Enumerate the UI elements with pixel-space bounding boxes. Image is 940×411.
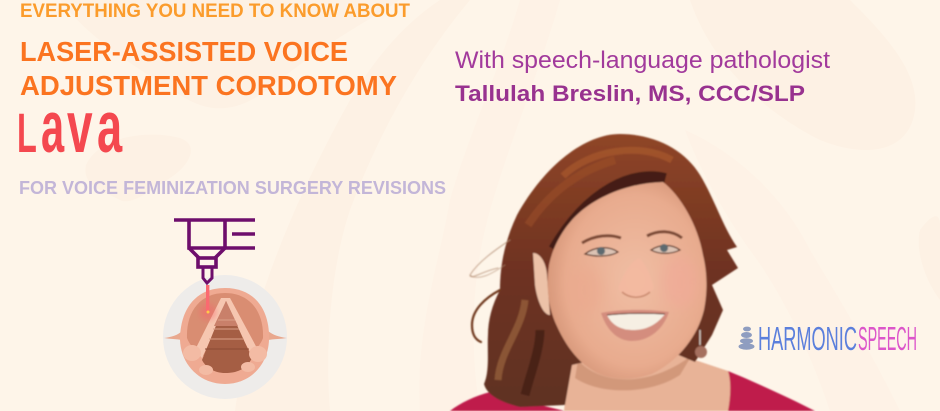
- main title: ADJUSTMENT CORDOTOMY: [20, 70, 397, 101]
- LAVA wordmark: L: [17, 102, 37, 164]
- subtitle: FOR VOICE FEMINIZATION SURGERY REVISIONS: [19, 178, 446, 198]
- wordmark: Harmonic: HARMONIC: [758, 320, 857, 357]
- LAVA wordmark: [17, 86, 123, 168]
- portrait photo: [450, 134, 815, 411]
- laser beam: [200, 285, 216, 320]
- hair: [484, 134, 738, 407]
- LAVA wordmark: a: [41, 86, 65, 168]
- main title: [20, 36, 397, 101]
- ear: [533, 253, 550, 315]
- icon: stacked stones: [738, 327, 754, 350]
- nose: [618, 258, 654, 297]
- logo: Harmonic Speech: [738, 320, 917, 357]
- face: [548, 182, 706, 379]
- LAVA wordmark: v: [67, 86, 93, 168]
- eyes: [585, 248, 618, 256]
- presenter intro: With speech-language pathologist: [455, 47, 830, 74]
- stray curls: [470, 240, 510, 342]
- main title: LASER-ASSISTED VOICE: [20, 36, 348, 67]
- icon: laser emitter: [174, 220, 255, 283]
- presenter name: Tallulah Breslin, MS, CCC/SLP: [455, 81, 805, 106]
- earring: [695, 330, 707, 358]
- illustration: larynx: [163, 275, 287, 399]
- kicker heading: EVERYTHING YOU NEED TO KNOW ABOUT: [20, 1, 410, 22]
- neck: [564, 345, 730, 411]
- mouth: [601, 310, 669, 341]
- shirt: [450, 371, 815, 411]
- LAVA wordmark: a: [97, 86, 123, 168]
- eyebrows: [582, 236, 621, 243]
